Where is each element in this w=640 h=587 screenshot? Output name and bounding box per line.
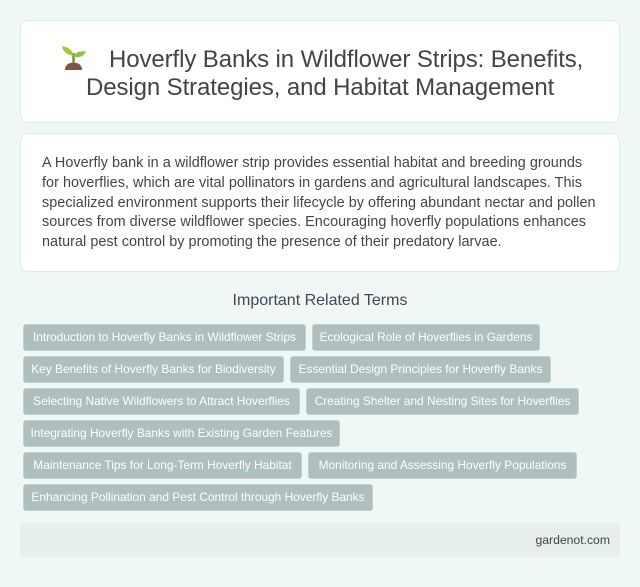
intro text: for hoverflies, which are vital pollinators in gardens and agricultural landscapes. This <box>42 175 582 191</box>
intro text: sources from diverse wildflower species. Encouraging hoverfly populations enhances <box>42 214 586 230</box>
tag: Key Benefits of Hoverfly Banks for Biodiversity <box>31 362 276 376</box>
intro text: natural pest control by promoting the presence of their predatory larvae. <box>42 234 502 250</box>
tag: Ecological Role of Hoverflies in Gardens <box>320 330 532 344</box>
tag <box>23 324 306 351</box>
tag: Integrating Hoverfly Banks with Existing Garden Features <box>30 426 333 440</box>
tag <box>308 452 577 479</box>
tag: Essential Design Principles for Hoverfly Banks <box>299 362 542 376</box>
heading: important related terms: Important Related Terms <box>233 292 407 309</box>
tag <box>290 356 551 383</box>
tag <box>23 388 300 415</box>
tag: Monitoring and Assessing Hoverfly Populations <box>319 458 566 472</box>
tag list <box>23 324 579 511</box>
tag: Maintenance Tips for Long-Term Hoverfly Habitat <box>33 458 292 472</box>
tag <box>312 324 540 351</box>
footer bar <box>20 523 620 557</box>
icon: sprout <box>62 46 86 70</box>
tag: Creating Shelter and Nesting Sites for Hoverflies <box>315 394 570 408</box>
panel: introduction <box>20 133 620 272</box>
panel: title card <box>20 20 620 123</box>
tag: Enhancing Pollination and Pest Control through Hoverfly Banks <box>31 490 365 504</box>
intro text: specialized environment supports their lifecycle by offering abundant nectar and pollen <box>42 195 596 211</box>
title line 1: Hoverfly Banks in Wildflower Strips: Benefits, <box>109 46 583 73</box>
tag <box>23 420 340 447</box>
tag <box>306 388 579 415</box>
footer source text: gardenot.com <box>535 533 610 547</box>
tag: Selecting Native Wildflowers to Attract Hoverflies <box>33 394 290 408</box>
tag: Introduction to Hoverfly Banks in Wildflower Strips <box>33 330 296 344</box>
title line 2: Design Strategies, and Habitat Management <box>86 74 554 101</box>
tag <box>23 484 373 511</box>
tag <box>23 452 302 479</box>
intro text <box>42 155 596 250</box>
tag <box>23 356 284 383</box>
intro text: A Hoverfly bank in a wildflower strip provides essential habitat and breeding grounds <box>42 155 582 171</box>
